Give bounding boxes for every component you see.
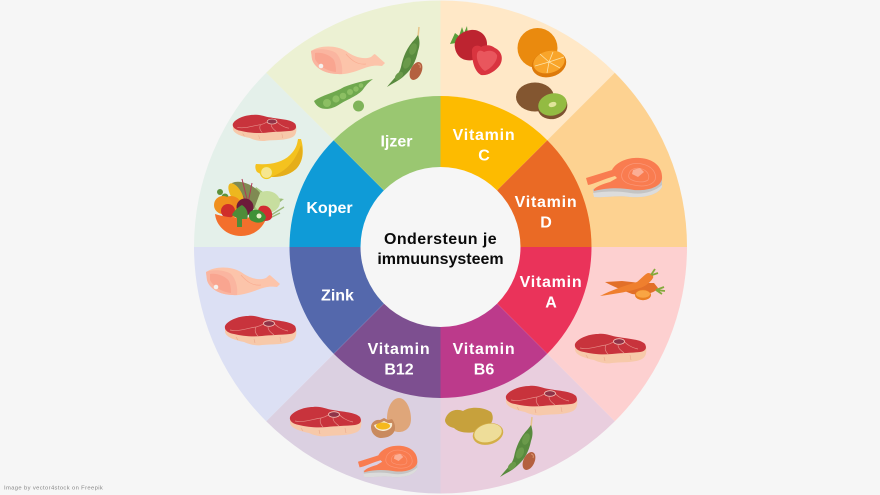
outer segment: Vitamin C xyxy=(440,0,615,247)
panel: Vitamin C xyxy=(440,0,615,247)
outer segment: Ijzer xyxy=(266,0,440,247)
mid segment: Koper xyxy=(290,140,440,247)
icon: steak xyxy=(575,334,646,363)
icon: steak xyxy=(290,407,361,436)
label: Vitamin D: Vitamin xyxy=(515,194,577,211)
title xyxy=(377,231,504,268)
outer segment: Koper xyxy=(194,73,440,247)
icon: steak xyxy=(225,316,296,345)
mid segment: Vitamin B12 xyxy=(334,247,440,398)
mid segment: Vitamin A xyxy=(440,247,592,354)
label: Vitamin B6: Vitamin xyxy=(453,341,515,358)
label: Vitamin C xyxy=(453,127,515,164)
icon: orange xyxy=(518,28,569,81)
icon: pea pod xyxy=(314,79,373,109)
panel: Koper xyxy=(194,73,440,247)
icon: fish fillet xyxy=(311,46,385,74)
label: Vitamin D: D xyxy=(540,214,552,232)
label: Vitamin B6 xyxy=(453,341,515,378)
mid segment: Ijzer xyxy=(334,96,440,247)
icon: potatoes xyxy=(445,408,506,448)
icon: bean pod xyxy=(500,417,538,477)
panel: Vitamin D xyxy=(440,73,687,247)
label: Koper: Koper xyxy=(306,200,353,217)
title: immuunsysteem xyxy=(377,251,504,268)
outer segment: Vitamin B6 xyxy=(440,247,615,494)
icon: fish fillet xyxy=(206,268,280,295)
panel: Vitamin B6 xyxy=(440,247,615,494)
icon: banana xyxy=(255,139,303,178)
icon: steak xyxy=(233,115,296,141)
outer segment: Zink xyxy=(194,247,440,421)
mid segment: Zink xyxy=(290,247,440,354)
panel: Ijzer xyxy=(266,0,440,247)
icon: egg xyxy=(371,398,411,438)
title: Ondersteun je xyxy=(384,231,497,248)
label: Vitamin D xyxy=(515,194,577,232)
outer segment: Vitamin B12 xyxy=(266,247,440,494)
panel: Vitamin A xyxy=(440,247,687,421)
label: Vitamin B12: Vitamin xyxy=(368,341,430,358)
icon: bean pod xyxy=(387,27,425,87)
outer segment: Vitamin D xyxy=(440,73,687,247)
center circle xyxy=(360,167,520,327)
icon: kiwi xyxy=(516,82,570,122)
icon: carrots xyxy=(600,269,665,300)
label: Vitamin C: Vitamin xyxy=(453,127,515,144)
label: Ijzer: Ijzer xyxy=(380,134,413,150)
panel: Vitamin B12 xyxy=(266,247,440,494)
label: Vitamin A: A xyxy=(545,294,557,312)
label: Vitamin B12 xyxy=(368,341,430,378)
label: Vitamin B12: B12 xyxy=(384,362,414,378)
label: Vitamin A: Vitamin xyxy=(520,274,582,291)
label: Zink: Zink xyxy=(321,288,354,304)
outer segment: Vitamin A xyxy=(440,247,687,421)
mid segment: Vitamin B6 xyxy=(440,247,547,398)
label: Vitamin A xyxy=(520,274,582,312)
panel: Zink xyxy=(194,247,440,421)
icon: salmon steak xyxy=(358,446,417,477)
icon: steak xyxy=(506,386,577,415)
icon: salmon steak xyxy=(586,158,662,197)
label: Vitamin B6: B6 xyxy=(474,362,494,378)
image credit: Image by vector4stock on Freepik xyxy=(4,486,103,492)
icon: strawberries xyxy=(450,26,502,75)
label: Vitamin C: C xyxy=(478,148,490,164)
mid segment: Vitamin C xyxy=(440,96,547,247)
wheel xyxy=(194,0,687,494)
mid segment: Vitamin D xyxy=(440,140,592,247)
icon: pea xyxy=(353,100,364,112)
icon: salad bowl xyxy=(214,179,284,236)
